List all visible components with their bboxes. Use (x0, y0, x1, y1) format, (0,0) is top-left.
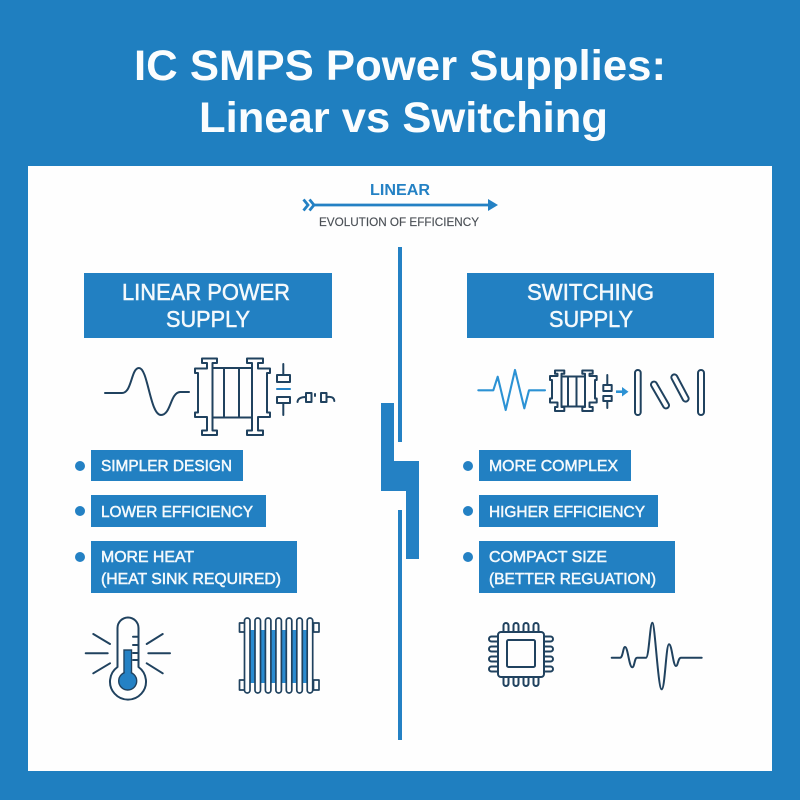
bullet: more complex (463, 450, 631, 481)
title: IC SMPS Power Supplies: (134, 42, 666, 90)
center divider with lightning bolt (381, 247, 419, 740)
waveform (478, 370, 545, 410)
bullet: compact size: COMPACT SIZE (489, 549, 607, 566)
bullet: lower efficiency (75, 495, 266, 527)
switching bars (635, 370, 704, 415)
bullet: higher efficiency: HIGHER EFFICIENCY (489, 504, 645, 521)
arrow: evolution of efficiency: LINEAR (370, 182, 430, 199)
bullet: lower efficiency: LOWER EFFICIENCY (101, 504, 253, 521)
heading: linear power supply: SUPPLY (166, 306, 250, 332)
heading: linear power supply (84, 273, 332, 338)
icon: thermometer (86, 618, 170, 700)
arrow: evolution of efficiency (304, 182, 498, 229)
icon: microchip (489, 623, 553, 686)
transformer (550, 370, 612, 411)
bullet: more heat: (HEAT SINK REQUIRED) (101, 571, 281, 588)
icon: switching circuit diagram (478, 370, 704, 415)
bullet: more complex: MORE COMPLEX (489, 458, 618, 475)
arrow (616, 387, 628, 396)
bullet: compact size (463, 541, 675, 593)
icon: radiator heat sink (240, 618, 319, 693)
heading: switching supply: SUPPLY (549, 306, 633, 332)
list: linear features (75, 450, 297, 593)
panel: comparison card (28, 166, 772, 771)
bullet: compact size: (BETTER REGUATION) (489, 571, 656, 588)
bullet: more heat (75, 541, 297, 593)
bullet: simpler design: SIMPLER DESIGN (101, 458, 232, 475)
title: Linear vs Switching (199, 94, 608, 142)
heading: switching supply: SWITCHING (527, 279, 654, 305)
list: switching features (463, 450, 675, 593)
icon: linear circuit diagram (105, 358, 334, 435)
heading: switching supply (467, 273, 714, 338)
heading: linear power supply: LINEAR POWER (122, 279, 290, 305)
title (134, 42, 666, 142)
bullet: higher efficiency (463, 495, 658, 527)
bullet: more heat: MORE HEAT (101, 549, 194, 566)
arrow: evolution of efficiency: EVOLUTION OF EFFICIENCY (319, 215, 479, 229)
icon: ECG waveform (612, 623, 702, 689)
bullet: simpler design (75, 450, 243, 481)
